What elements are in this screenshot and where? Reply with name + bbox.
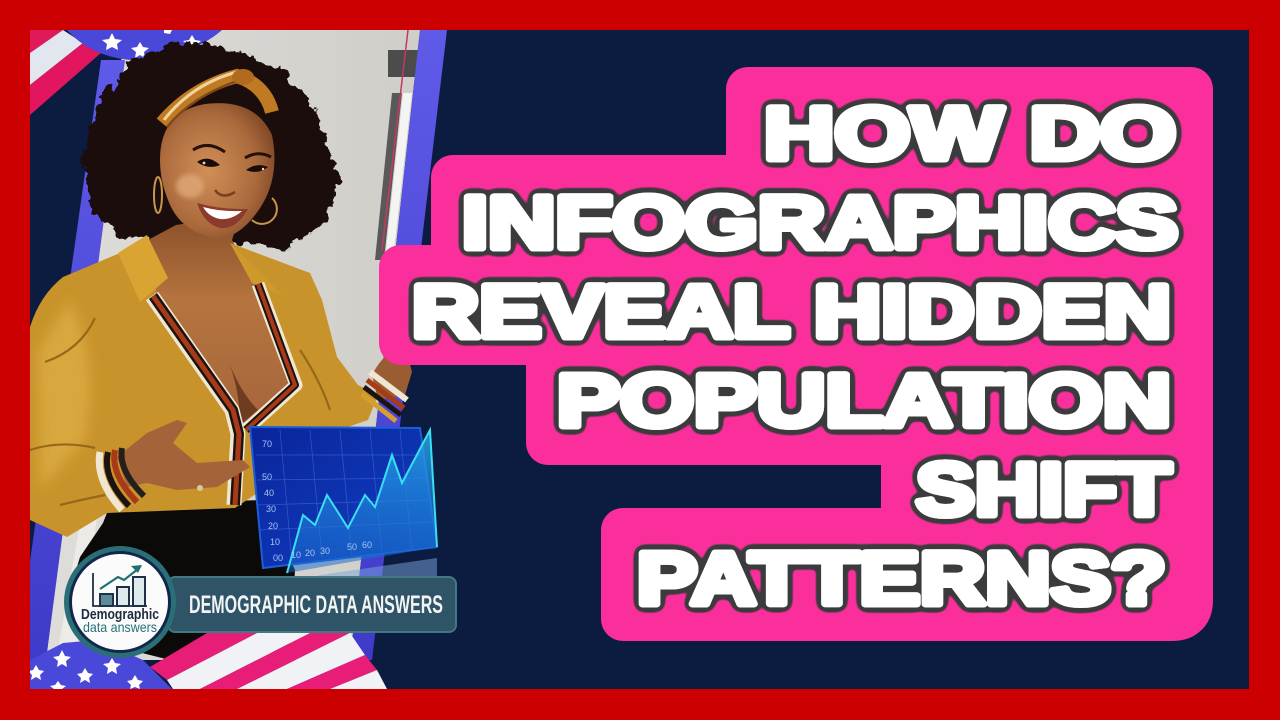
chart axis labels: 10 [291,550,301,560]
left purple band [30,60,125,660]
left hand [117,420,250,490]
screen grid [256,430,432,562]
chart axis labels: 20 [305,548,315,558]
chart axis labels: 20 [268,521,278,531]
earrings [154,177,277,224]
title [412,92,1178,620]
bottom flag stars [28,640,172,689]
eyes and brows [193,145,271,172]
title: SHIFT [916,448,1171,531]
hair [82,42,340,250]
neck and chest [149,224,288,424]
photo panel: presenter with chart [16,30,447,689]
chart screen [250,427,437,577]
right purple band [350,30,447,660]
right cuff [362,372,407,421]
area line chart [287,430,437,573]
chart axis labels: 40 [264,488,274,498]
channel name banner [168,577,456,632]
cleavage shadow [228,360,258,425]
title: REVEAL HIDDEN [412,270,1171,353]
chart axis labels: 50 [347,542,357,552]
right hand [372,357,412,399]
blouse placket stripes [152,284,296,505]
headband [162,69,272,127]
top flag: stars [67,30,222,60]
skirt [70,500,295,665]
whiteboard backdrop [46,30,420,660]
chart axis labels: 10 [270,537,280,547]
chart axis labels: 30 [266,504,276,514]
smile [197,203,248,228]
screen base reflection [315,558,437,577]
left cuff [99,448,144,510]
left collar [118,235,168,302]
face [160,103,274,238]
logo bar chart icon [93,565,147,606]
chart axis labels: 60 [362,540,372,550]
chart axis labels: 50 [262,472,272,482]
title: INFOGRAPHICS [462,181,1178,264]
chart axis labels: 70 [262,439,272,449]
chart axis labels: 00 [273,553,283,563]
bottom flag stripes [150,633,387,689]
chart axis labels: 30 [320,546,330,556]
woman [30,42,412,665]
title: POPULATION [557,359,1171,442]
ring [197,485,203,491]
channel logo badge: data answers [83,619,157,635]
title highlight shape [401,89,1191,619]
top-left flag stripes [30,30,102,115]
chart axis labels [262,439,372,563]
sleeve fold lines [30,318,330,505]
title: PATTERNS? [637,537,1166,620]
blouse body [30,237,378,537]
channel logo badge [64,546,176,658]
nose [215,190,235,196]
logo wordmark: Demographic [81,606,159,623]
blouse highlights [38,300,90,490]
title: HOW DO [764,92,1176,175]
face highlights [176,174,204,198]
channel name: DEMOGRAPHIC DATA ANSWERS [189,591,443,619]
right collar [230,244,258,284]
